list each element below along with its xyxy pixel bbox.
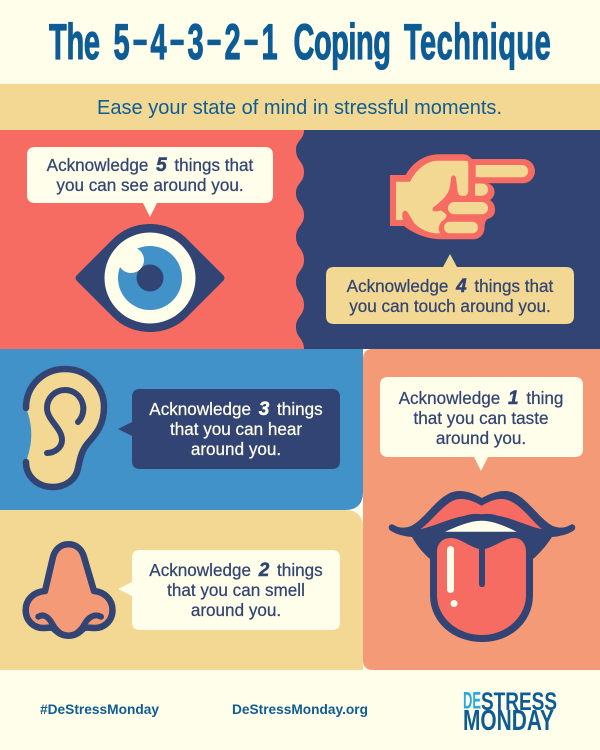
logo [463,688,557,737]
panel: taste [363,349,600,670]
speech bubble: smell: that you can smell [167,581,305,600]
speech bubble: hear: around you. [191,440,281,459]
logo: STRESS [481,688,557,716]
title: Technique [404,14,551,70]
icon: ear [26,369,104,487]
speech bubble: touch: Acknowledge 4 things that [347,276,554,297]
speech bubble: taste: that you can taste [414,409,548,428]
title: The [49,14,100,70]
logo: MONDAY [463,705,554,737]
title: 2 [225,14,241,70]
subtitle band [0,84,600,130]
logo: DE [463,688,481,714]
title: 5 [114,14,130,70]
speech bubble: hear [118,389,340,469]
title: 1 [262,14,278,70]
website: DeStressMonday.org [232,702,368,717]
speech bubble: see [27,147,273,217]
icon: eye [76,224,224,332]
speech bubble: smell: Acknowledge 2 things [149,560,323,581]
hashtag: #DeStressMonday [40,702,159,717]
speech bubble: touch: you can touch around you. [349,297,551,316]
speech bubble: taste: Acknowledge 1 thing [399,388,563,409]
speech bubble: smell [118,550,340,630]
panel: touch [296,130,600,349]
speech bubble: smell: around you. [191,601,281,620]
speech bubble: touch [326,254,574,324]
speech bubble: hear: that you can hear [170,420,302,439]
title: – [133,14,147,64]
title: Coping [294,14,391,70]
speech bubble: hear: Acknowledge 3 things [149,399,323,420]
icon: lips and tongue [389,491,575,642]
subtitle band: Ease your state of mind in stressful moments. [97,97,502,119]
speech bubble: taste [380,377,583,471]
title: 4 [151,14,167,70]
panel: hear [0,349,363,510]
title: 3 [188,14,204,70]
panel: see [0,130,306,349]
speech bubble: taste: around you. [436,429,526,448]
title: – [170,14,184,64]
speech bubble: see: Acknowledge 5 things that [47,155,254,176]
speech bubble: see: you can see around you. [56,176,244,195]
title [49,14,551,70]
title: – [244,14,258,64]
title: – [207,14,221,64]
icon: nose [26,544,113,636]
panel: smell [0,510,363,670]
icon: pointing hand [390,154,535,239]
